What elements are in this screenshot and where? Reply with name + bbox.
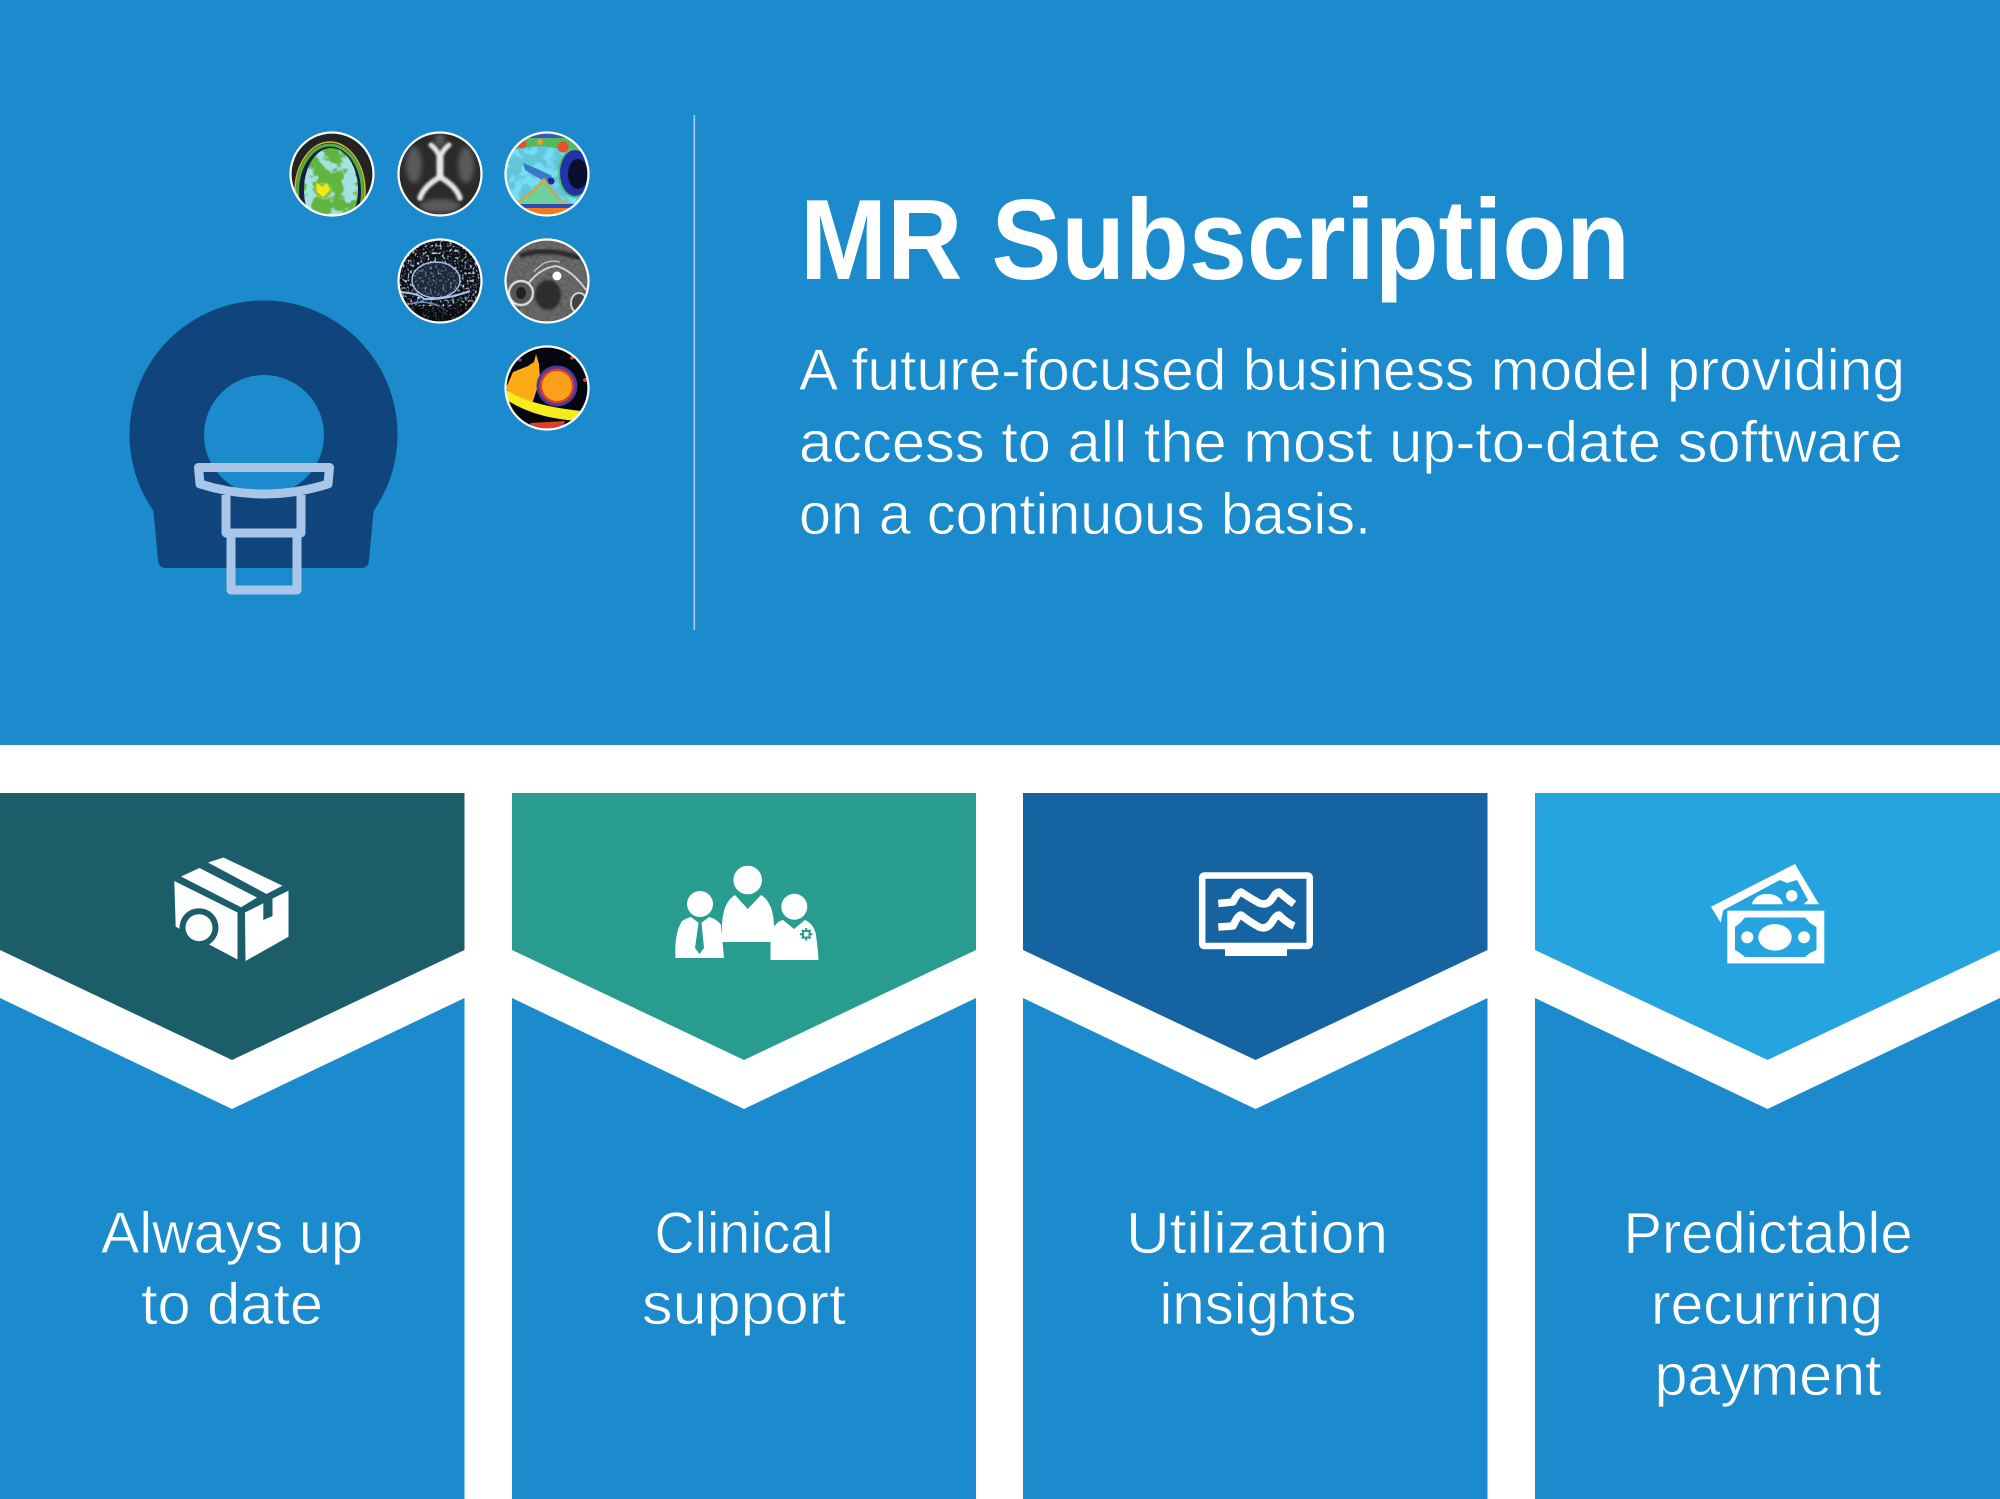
panel: predictable recurring payment — [1535, 793, 2000, 1499]
scan image: colour liver map — [505, 132, 592, 220]
description text — [799, 338, 1905, 547]
label: Utilization — [1126, 1201, 1388, 1266]
label: Clinical — [654, 1201, 834, 1266]
scan image: brain perfusion map — [289, 131, 375, 217]
label: insights — [1160, 1272, 1356, 1337]
panel: always up to date — [0, 793, 464, 1499]
label: payment — [1654, 1343, 1882, 1408]
icon: MR scanner — [129, 300, 397, 590]
card body — [1535, 998, 2000, 1499]
patient table — [198, 468, 330, 590]
scan image: cardiac map — [505, 346, 592, 432]
label: Predictable — [1624, 1201, 1912, 1266]
card body — [1023, 998, 1488, 1499]
panel: clinical support — [512, 793, 976, 1499]
title: MR Subscription — [800, 177, 1630, 304]
chevron header — [0, 793, 464, 1060]
scan image: grey brain slice — [398, 132, 482, 216]
label — [101, 1201, 363, 1337]
panel: header banner background — [0, 0, 2000, 745]
label: to date — [141, 1272, 323, 1337]
label — [642, 1201, 846, 1337]
chevron header — [512, 793, 976, 1060]
panel: utilization insights — [1023, 793, 1488, 1499]
description text: access to all the most up-to-date software — [799, 410, 1903, 475]
description text: on a continuous basis. — [799, 482, 1371, 547]
scanner gantry — [129, 300, 397, 568]
divider line — [694, 115, 695, 630]
label: Always up — [101, 1201, 363, 1266]
card body — [512, 998, 976, 1499]
label: recurring — [1651, 1272, 1883, 1337]
icon: monitor with waves — [1202, 876, 1310, 956]
chevron header — [1023, 793, 1488, 1060]
icon: package box — [174, 858, 288, 961]
chevron header — [1535, 793, 2000, 1060]
icon: banknotes — [1711, 864, 1824, 963]
label: support — [642, 1272, 846, 1337]
scan image: abdomen slice — [505, 239, 589, 323]
label — [1126, 1201, 1388, 1337]
description text: A future-focused business model providing — [799, 338, 1905, 403]
scan image: vessel angiography — [398, 239, 482, 324]
card body — [0, 998, 464, 1499]
icon: clinical team — [675, 866, 818, 960]
label — [1624, 1201, 1912, 1408]
